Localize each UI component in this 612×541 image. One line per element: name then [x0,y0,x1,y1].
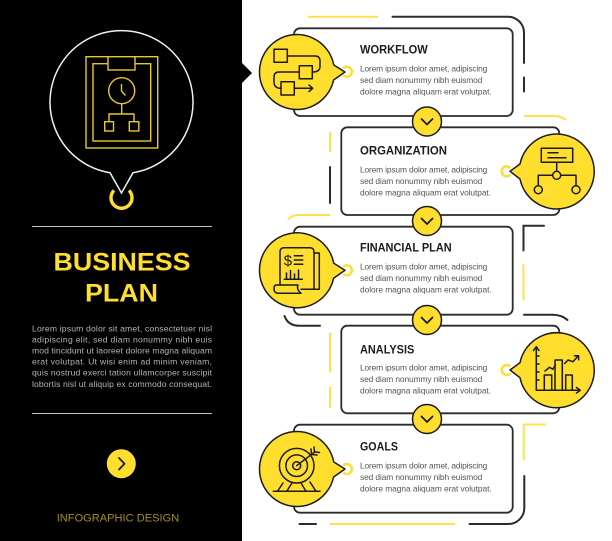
panel: analysis card [341,326,594,413]
next button [107,449,136,478]
title: PLAN [85,280,158,308]
body text: dolore magna aliquam erat volutpat. [360,483,492,493]
icon: financial report [274,248,319,293]
body text: dolore magna aliquam erat volutpat. [360,86,492,96]
body text: sed diam nonummy nibh euismod [360,273,483,283]
body text: Lorem ipsum dolor amet, adipiscing [360,363,488,373]
sidebar description text [32,323,213,389]
sidebar description text: lobortis nisl ut aliquip ex commodo consequat. [32,379,212,389]
yellow ring [502,365,510,375]
body text: Lorem ipsum dolor amet, adipiscing [360,164,488,174]
sidebar description text: Lorem ipsum dolor sit amet, consectetuer nisl [32,323,212,333]
title: BUSINESS [54,249,190,277]
body text: sed diam nonummy nibh euismod [360,374,483,384]
body text [360,63,492,96]
body text [360,460,492,493]
body text: dolore magna aliquam erat volutpat. [360,187,491,197]
panel: financial plan card [259,227,513,315]
yellow ring [502,166,510,176]
body text: sed diam nonummy nibh euismod [360,176,483,186]
divider top [32,226,212,227]
icon: clipboard with clock and hierarchy [86,57,158,148]
heading: ANALYSIS [360,343,415,356]
body text [360,262,492,295]
speech bubble outline [50,31,193,193]
yellow ring below bubble [111,190,132,208]
connector: workflow to organization [412,107,442,136]
icon: workflow diagram [274,49,320,95]
panel: organization card [341,127,594,215]
bubble [259,432,345,507]
yellow ring [343,265,352,275]
connector: financial plan to analysis [412,306,442,334]
heading: WORKFLOW [360,43,428,56]
sidebar description text: quis nostrud exerci tation ullamcorper suscipit [32,368,213,378]
body text: sed diam nonummy nibh euismod [360,75,483,85]
sidebar pointer arrow [242,63,252,83]
icon: org chart [534,148,580,194]
footer label: INFOGRAPHIC DESIGN [57,513,179,525]
body text: Lorem ipsum dolor amet, adipiscing [360,63,488,73]
title [54,249,190,308]
panel: goals card [259,425,513,513]
divider bottom [32,413,212,414]
bubble [259,233,345,308]
icon: bar chart with trend [534,347,580,393]
bubble [259,35,345,110]
body text: Lorem ipsum dolor amet, adipiscing [360,262,488,272]
body text [360,363,491,396]
sidebar description text: adipiscing elit, sed diam nonummy nibh euis [32,334,212,344]
body text: dolore magna aliquam erat volutpat. [360,285,492,295]
heading: ORGANIZATION [360,144,447,157]
panel: workflow card [259,28,513,116]
panel: left black sidebar [0,0,252,541]
bubble [510,333,594,408]
body text: Lorem ipsum dolor amet, adipiscing [360,460,488,470]
decorative track segments [284,17,568,524]
sidebar description text: erat volutpat. Ut wisi enim ad minim veniam, [32,357,212,367]
yellow ring [343,67,352,77]
body text [360,164,491,197]
body text: sed diam nonummy nibh euismod [360,472,483,482]
heading: FINANCIAL PLAN [360,242,452,255]
connector: organization to financial plan [412,206,442,236]
body text: dolore magna aliquam erat volutpat. [360,386,491,396]
yellow ring [343,464,352,474]
bubble [510,134,594,209]
heading: GOALS [360,440,398,453]
sidebar description text: mod tincidunt ut laoreet dolore magna aliquam [32,346,212,356]
icon: target with arrow [273,447,320,491]
connector: analysis to goals [412,404,442,434]
dollar sign: $ [284,252,293,270]
